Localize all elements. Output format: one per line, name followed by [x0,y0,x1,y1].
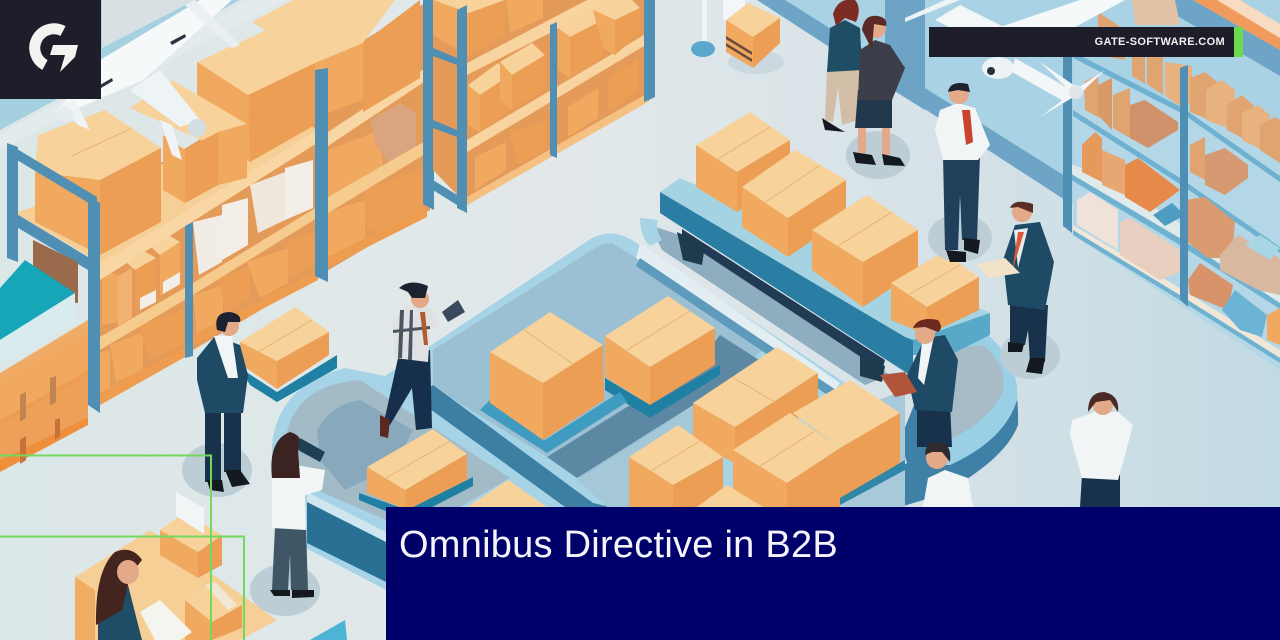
website bar [929,27,1234,57]
green accent [1234,27,1243,57]
icon: drone right [905,0,1125,117]
panel: back shelving [433,0,655,213]
back wall [0,0,1280,340]
teal cartons and bottom-left shelf [0,240,88,472]
person: man in navy suit left [182,312,252,497]
top row boxes [1098,12,1280,163]
row 2 boxes [102,160,313,326]
person: woman in plaid shirt [380,282,465,438]
icon: G logo [29,23,78,72]
icon: signpost [691,0,745,57]
person: man in white shirt at bottom [923,442,973,507]
boxes on top shelf [35,0,420,255]
person: man at conveyor [880,319,958,447]
back shelf crossbeams [433,48,457,205]
person: woman with red hair [822,0,862,132]
outer rim [272,233,900,590]
bottom row boxes [1077,192,1280,345]
icon: blue folder corner [310,620,347,640]
row 3 boxes [100,233,315,397]
seated woman [96,550,192,640]
title: Omnibus Directive in B2B [399,524,838,566]
panel: main conveyor loop [272,233,905,590]
person: man in white shirt with red tie [928,83,992,262]
panel: right shelving [1063,12,1280,370]
panel: left shelving [0,0,434,472]
shelf interior [100,0,430,405]
round section surface [287,380,510,520]
right shelf boards [1068,52,1280,363]
parcel on desk [185,582,242,640]
logo block [0,0,101,99]
green frame lines [0,456,244,640]
panel: upper conveyor [640,178,990,385]
person: dark suited woman [846,16,910,179]
back shelf uprights [457,0,655,213]
person: woman at right [1070,392,1133,507]
desk drawer cabinet [160,492,222,578]
panel: desk with worker [75,492,277,640]
main surface [433,243,770,485]
box on floor [726,3,784,74]
second row boxes [1084,75,1248,195]
pallets [240,355,905,520]
third row boxes [1082,132,1280,295]
shelf uprights [7,0,434,413]
boxes on main belt [240,296,900,510]
icon: drone left [55,0,240,160]
title panel [386,507,1280,640]
shelf boards [15,67,427,405]
panel: right conveyor curve [830,333,1018,507]
right column boxes [328,103,423,257]
front wall [307,497,386,582]
back shelf boxes [433,0,640,190]
boxes on upper belt [696,112,979,335]
back shelf boards [467,0,649,205]
website label: GATE-SOFTWARE.COM [1095,36,1225,48]
person: woman in white shirt with tablet [250,432,325,616]
person: man with clipboard right [977,202,1060,379]
